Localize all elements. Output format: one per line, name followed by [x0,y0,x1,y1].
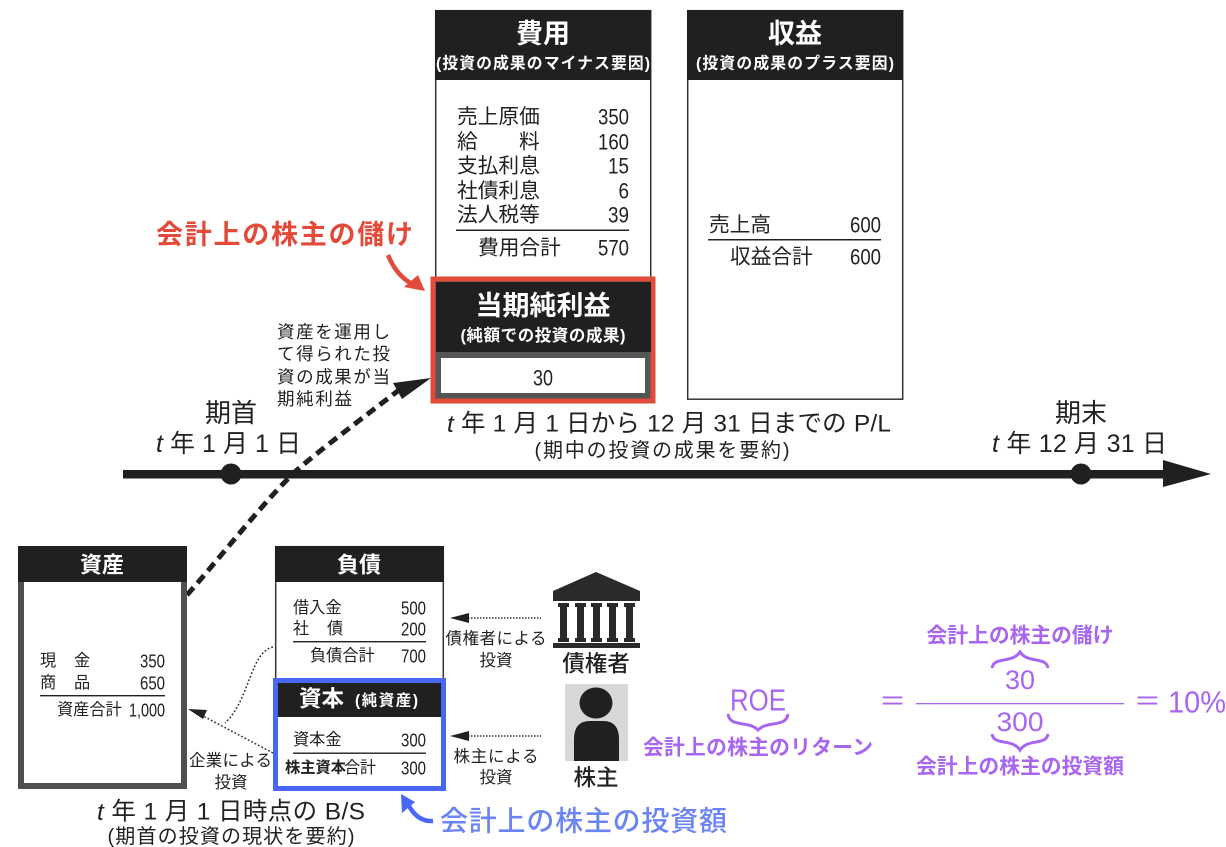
callout: accounting shareholder profit: 会計上の株主の儲け [156,220,413,250]
panel: liabilities: 社 [293,620,309,638]
panel: expenses: 350 [598,104,629,130]
panel: revenue: 600 [850,244,881,270]
fraction: 会計上の株主の儲け [926,624,1114,648]
label: end of period: 期末 [1055,398,1107,428]
panel: revenue: 売上高 [709,214,771,236]
panel: assets: 650 [140,672,165,694]
formula: ROE [643,624,1226,778]
panel: assets: 金 [74,652,90,670]
panel: assets: 現 [40,652,56,670]
equals sign: ＝ [879,687,906,717]
ROE left side: 会計上の株主のリターン [643,736,873,760]
panel: net income [433,279,653,401]
text: investment by company: 投資 [214,773,248,792]
panel: liabilities: 200 [401,618,426,640]
fraction [916,624,1124,778]
panel: expenses: 支払利息 [457,154,540,178]
panel: expenses: 費用 [516,19,570,49]
label: start of period [156,398,301,458]
panel: revenue: 収益合計 [730,246,813,268]
panel: revenue: (投資の成果のプラス要因) [696,54,894,72]
panel: expenses: 社債利息 [457,180,540,202]
panel: liabilities [275,546,444,682]
label: end of period: t 年 12 月 31 日 [992,430,1167,458]
panel: assets: 商 [40,674,56,692]
panel: equity: 合計 [344,759,376,777]
panel: net income: 当期純利益 [476,291,610,321]
caption: B/S [97,798,365,847]
arrow: red to net income [388,255,425,291]
arrow: creditor investment [450,613,541,623]
caption: P/L [447,410,891,462]
panel: liabilities: 負債合計 [310,647,375,665]
text: investment by shareholders: 投資 [480,768,512,787]
text: investment by creditors [446,629,546,670]
panel: expenses: 160 [598,130,629,154]
label: end of period [992,398,1167,458]
panel: net income: (純額での投資の成果) [460,325,626,345]
panel: revenue [687,10,903,399]
label: start of period: t 年 1 月 1 日 [156,430,301,458]
panel: equity: 300 [401,730,426,750]
caption: P/L: t 年 1 月 1 日から 12 月 31 日までの P/L [447,410,891,438]
panel: equity: 300 [401,758,426,778]
panel: expenses: 15 [608,154,629,178]
text: investment by creditors: 債権者による [446,629,546,648]
text: investment result note [277,322,390,409]
label: creditor: 債権者 [562,652,630,676]
ROE left side: ROE [730,682,786,718]
panel: expenses: 570 [598,236,629,260]
panel: expenses: 費用合計 [478,236,561,260]
caption: B/S: t 年 1 月 1 日時点の B/S [97,798,365,826]
caption: P/L: (期中の投資の成果を要約) [534,439,790,462]
panel: liabilities: 負債 [337,552,381,578]
panel: revenue: 600 [850,212,881,238]
panel: assets [18,546,187,786]
panel: expenses: 売上原価 [457,106,540,128]
panel: revenue: 収益 [768,19,822,49]
panel: expenses: (投資の成果のマイナス要因) [436,54,650,72]
fraction: 会計上の株主の投資額 [916,756,1124,778]
result: ＝ [1134,687,1161,717]
ROE left side [643,682,873,760]
icon: shareholder [565,684,628,761]
label: shareholder: 株主 [573,766,619,790]
panel: expenses: 法人税等 [457,204,540,226]
fraction: 30 [1005,665,1035,695]
panel: liabilities: 700 [401,646,426,666]
text: investment by shareholders: 株主による [454,747,538,766]
panel: liabilities: 債 [327,620,343,638]
panel: equity: 株主資本 [285,758,347,776]
arrow: dashed from assets to net income [187,378,431,595]
panel: expenses: 6 [618,178,629,204]
panel: equity: 資本金 [293,731,342,749]
panel: liabilities: 借入金 [293,599,342,617]
text: investment by company [189,751,272,792]
arrow: blue to equity [401,794,433,821]
text: investment by creditors: 投資 [480,651,512,670]
text: investment result note: 資産を運用し [277,322,390,342]
text: investment result note: 資の成果が当 [277,367,390,387]
panel: expenses: 39 [608,202,629,228]
arrow: dotted from liabilities and equity to assets [188,647,273,753]
text: investment by shareholders [454,747,538,787]
panel: liabilities: 500 [401,598,426,618]
icon: bank [553,572,640,648]
callout: accounting shareholder investment: 会計上の株主の投資額 [440,806,727,836]
panel: net income: 30 [533,366,553,390]
panel: assets: 350 [140,650,165,672]
panel: equity: 資本 [299,686,345,712]
panel: equity: (純資産) [355,690,418,710]
fraction: 300 [996,707,1044,737]
text: investment by company: 企業による [189,751,272,770]
panel: expenses [435,10,651,278]
panel: expenses: 料 [519,130,540,154]
panel: equity [276,680,444,788]
text: investment result note: 期純利益 [277,389,352,409]
panel: assets: 1,000 [129,700,165,720]
arrow: shareholder investment [450,731,541,741]
panel: assets: 資産合計 [57,701,122,719]
label: start of period: 期首 [205,398,257,428]
panel: expenses: 給 [457,130,478,154]
panel: assets: 品 [74,674,90,692]
panel: assets: 資産 [80,552,124,578]
timeline [123,460,1211,487]
text: investment result note: て得られた投 [277,344,390,364]
